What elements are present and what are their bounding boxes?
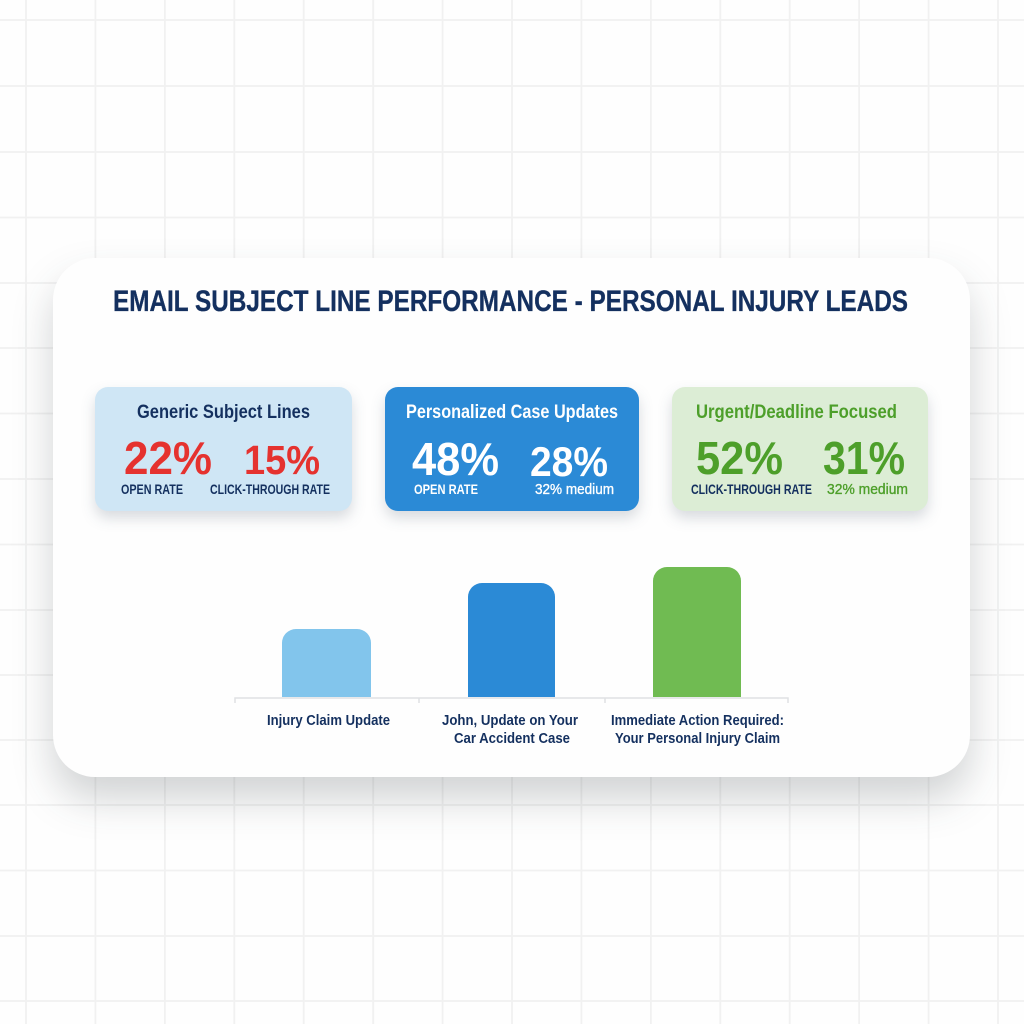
bar label: injury claim update: Injury Claim Update [267,713,390,729]
label: click-through rate: CLICK-THROUGH RATE [691,481,812,497]
stat: 22% open rate: 22% [124,432,212,484]
heading: generic subject lines: Generic Subject Lines [137,402,310,423]
bar: john update [468,583,555,697]
bar label: immediate action: Your Personal Injury Claim [615,731,780,747]
stat: 52% click-through rate: 52% [696,432,783,484]
bar label: john update [442,713,578,747]
bar label: john update: Car Accident Case [454,731,570,747]
panel: main white card [53,258,970,777]
bar label: john update: John, Update on Your [442,713,578,729]
stat: 31%: 31% [823,432,905,484]
heading: personalized case updates: Personalized Case Updates [406,402,618,423]
panel: generic subject lines [95,387,352,511]
label: open rate: OPEN RATE [414,481,478,497]
bar chart [235,567,788,747]
label: click-through rate: CLICK-THROUGH RATE [210,481,330,497]
stat: 28%: 28% [530,438,608,485]
label: 32% medium: 32% medium [827,482,908,498]
stat: 48% open rate: 48% [412,433,499,485]
label: 32% medium: 32% medium [535,482,614,498]
stat: 15% click-through rate: 15% [244,437,320,483]
label: open rate: OPEN RATE [121,481,183,497]
panel: urgent/deadline focused [672,387,928,511]
panel: personalized case updates [385,387,639,511]
axis [235,698,788,703]
bar: immediate action [653,567,741,697]
bar label: immediate action: Immediate Action Required: [611,713,784,729]
bar label: immediate action [611,713,784,747]
heading: urgent/deadline focused: Urgent/Deadline Focused [696,402,897,423]
bar: injury claim update [282,629,371,697]
